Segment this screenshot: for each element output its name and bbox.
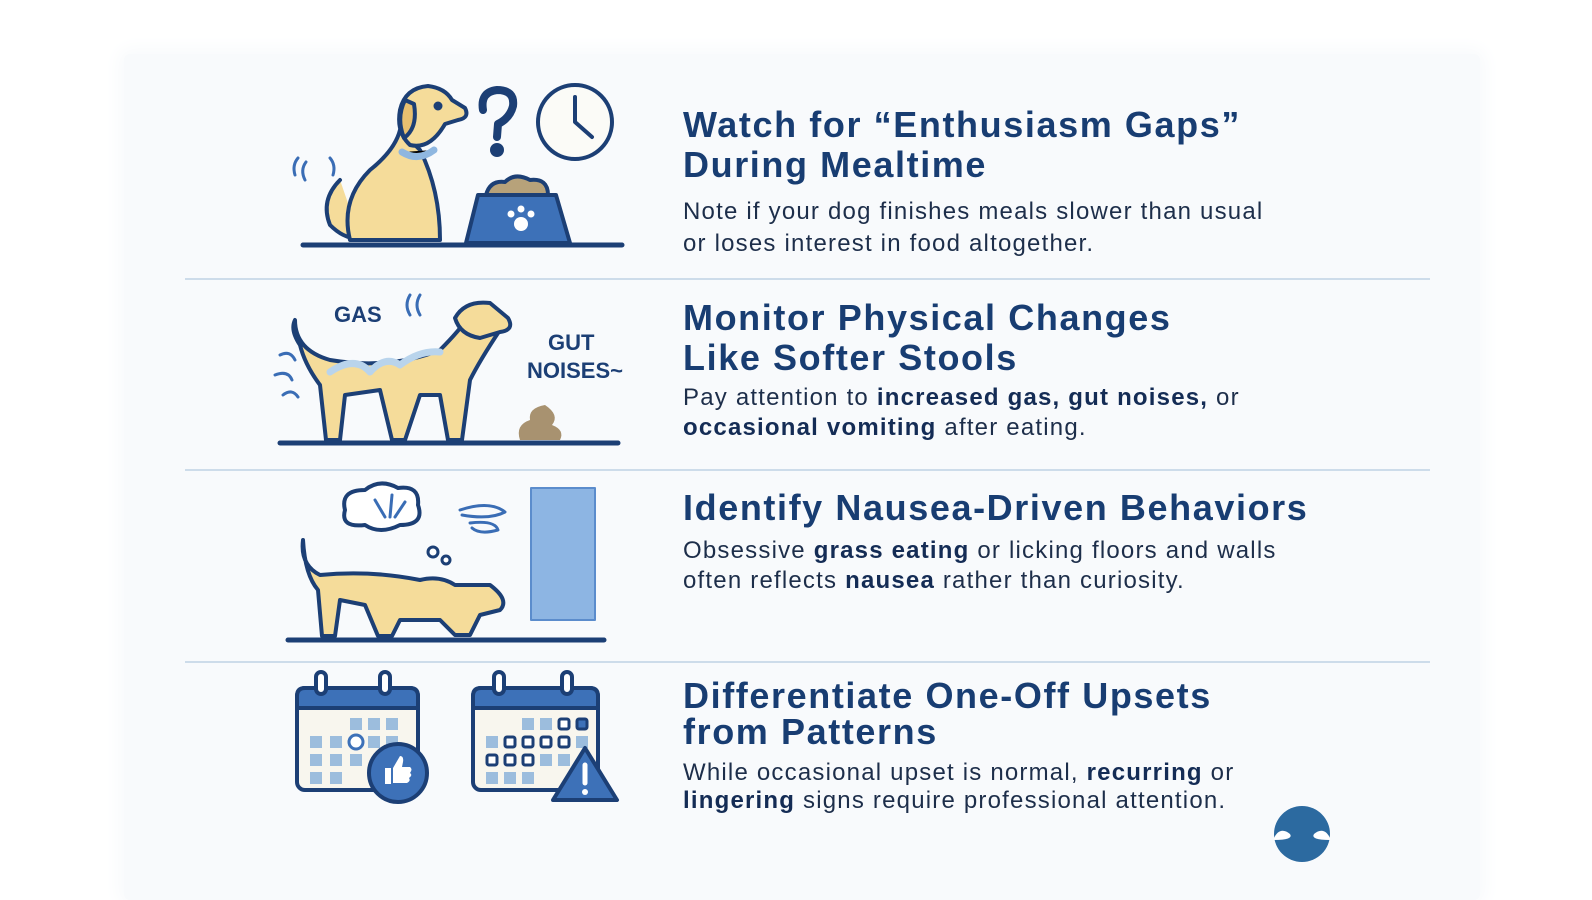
text: NOISES~: [527, 358, 623, 383]
heading 3: Identify Nausea-Driven Behaviors: [683, 487, 1308, 528]
text 4: [683, 759, 1234, 814]
heading 1: During Mealtime: [683, 144, 987, 185]
logo: [1274, 806, 1330, 862]
heading 1: [683, 104, 1241, 185]
heading 2: Like Softer Stools: [683, 337, 1018, 378]
illustration: sitting dog with bowl and clock: [294, 85, 622, 245]
heading 2: [683, 297, 1172, 378]
text 2: [683, 384, 1240, 441]
icon: calendar with warning: [473, 672, 617, 800]
text 4: While occasional upset is normal, recurring or: [683, 759, 1234, 786]
text 3: [683, 537, 1277, 594]
heading 1: Watch for “Enthusiasm Gaps”: [683, 104, 1241, 145]
text 3: often reflects nausea rather than curiosity.: [683, 567, 1185, 594]
label: GAS: GAS: [334, 302, 382, 327]
text 2: Pay attention to increased gas, gut noises, or: [683, 384, 1240, 411]
illustration: standing dog with gas: [275, 295, 618, 443]
label: gut noises: GUT: [548, 330, 595, 355]
text 4: lingering signs require professional attention.: [683, 787, 1226, 814]
illustration: sniffing dog with grass thought and wall: [288, 483, 604, 640]
heading 4: Differentiate One-Off Upsets: [683, 675, 1212, 716]
heading 2: Monitor Physical Changes: [683, 297, 1172, 338]
icon: calendar with thumbs up: [297, 672, 427, 802]
heading 4: from Patterns: [683, 711, 938, 752]
text 1: or loses interest in food altogether.: [683, 230, 1094, 257]
heading 4: [683, 675, 1212, 752]
text 3: Obsessive grass eating or licking floors and walls: [683, 537, 1277, 564]
text 2: occasional vomiting after eating.: [683, 414, 1087, 441]
text 1: [683, 198, 1263, 257]
text 1: Note if your dog finishes meals slower than usual: [683, 198, 1263, 225]
